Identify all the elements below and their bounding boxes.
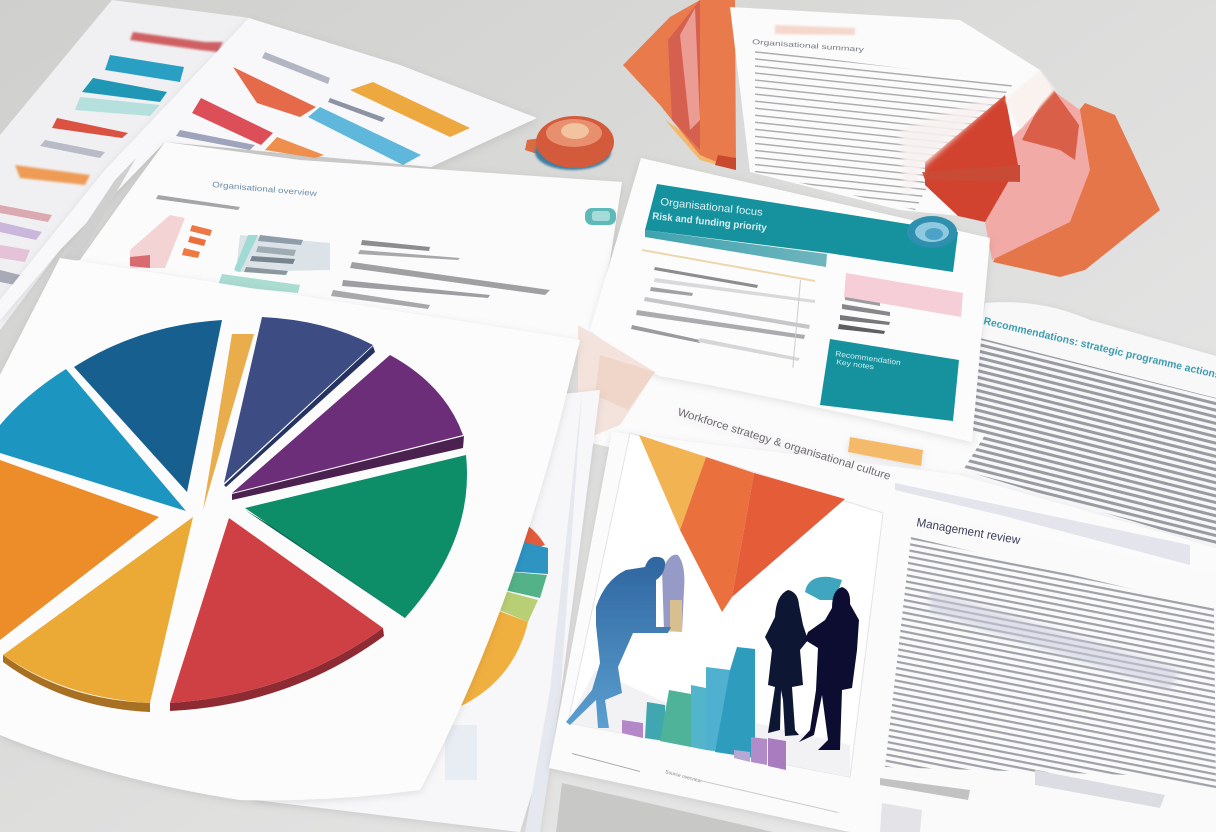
paper: colour band report: [0, 18, 537, 320]
figure: woman silhouette: [765, 590, 808, 736]
shape: left orange folded sheet: [623, 0, 736, 170]
desk: grey corner under poster: [556, 783, 773, 832]
slice: light blue: [0, 369, 186, 511]
paper: right text document: [960, 302, 1216, 548]
banner: teal header: Risk and funding priority: [652, 211, 768, 234]
paper: top-right text document: [730, 7, 1050, 220]
chart: orange triangle: [639, 435, 845, 612]
strip: grey paper edge: [895, 483, 1190, 565]
slice: dark blue: [74, 320, 222, 492]
block: right document lines: [962, 338, 1216, 545]
desk: grey gap beside central paper: [63, 158, 136, 258]
block: pink rows: [838, 273, 963, 334]
slice: navy: [224, 317, 375, 487]
chart: main pie: [0, 317, 467, 712]
paper: bottom-right text document: [875, 512, 1216, 832]
figure: blue translucent people: [566, 555, 684, 728]
text: banner lines: Organisational focus: [660, 196, 763, 219]
note: peach scrap: [578, 325, 655, 442]
table: left list rows: [631, 249, 815, 368]
heading: poster title: Workforce strategy & organisational culture: [676, 406, 892, 483]
block: document body lines: [755, 50, 1015, 210]
caption: poster footer: [572, 753, 838, 813]
paper: central chart report: [60, 142, 622, 342]
slice: red: [170, 518, 384, 711]
icon: teal badge: [585, 208, 616, 225]
box: teal note: Key notes: [836, 359, 875, 371]
slice: yellow: [3, 517, 193, 712]
paper: bottom centre poster sheet: [549, 406, 1216, 832]
paper: teal report: [590, 158, 990, 442]
box: teal note: Recommendation: [835, 349, 901, 367]
paper: top-left colour table: [0, 0, 250, 330]
slice: purple: [232, 355, 464, 500]
heading: chart report title: Organisational overview: [212, 180, 317, 198]
figure: man silhouette: [799, 587, 859, 750]
block: bottom document lines: [885, 537, 1216, 790]
chart: rising bars: [622, 647, 786, 770]
heading: bottom document title: Management review: [915, 515, 1022, 547]
icon: red button: [525, 116, 614, 170]
chart: small pie behind sheet: [445, 517, 548, 780]
icon: blue round badge: [907, 216, 957, 248]
paper: main pie sheet: [0, 258, 580, 800]
caption: poster footer: Source overview: [664, 769, 702, 785]
box: teal note: [820, 339, 959, 421]
paper: sheet behind pie: [255, 390, 600, 832]
banner: teal header: [645, 184, 958, 272]
slice: orange sliver: [203, 334, 254, 510]
slice: green: [245, 455, 467, 618]
shape: right orange and pink folded sheets: [900, 70, 1160, 277]
paper: white sheet under teal report: [578, 330, 1216, 580]
slice: orange: [0, 460, 159, 640]
heading: document title: Organisational summary: [752, 39, 865, 54]
icon: teal speech bubble: [805, 577, 842, 600]
panel: poster image: [566, 433, 883, 777]
